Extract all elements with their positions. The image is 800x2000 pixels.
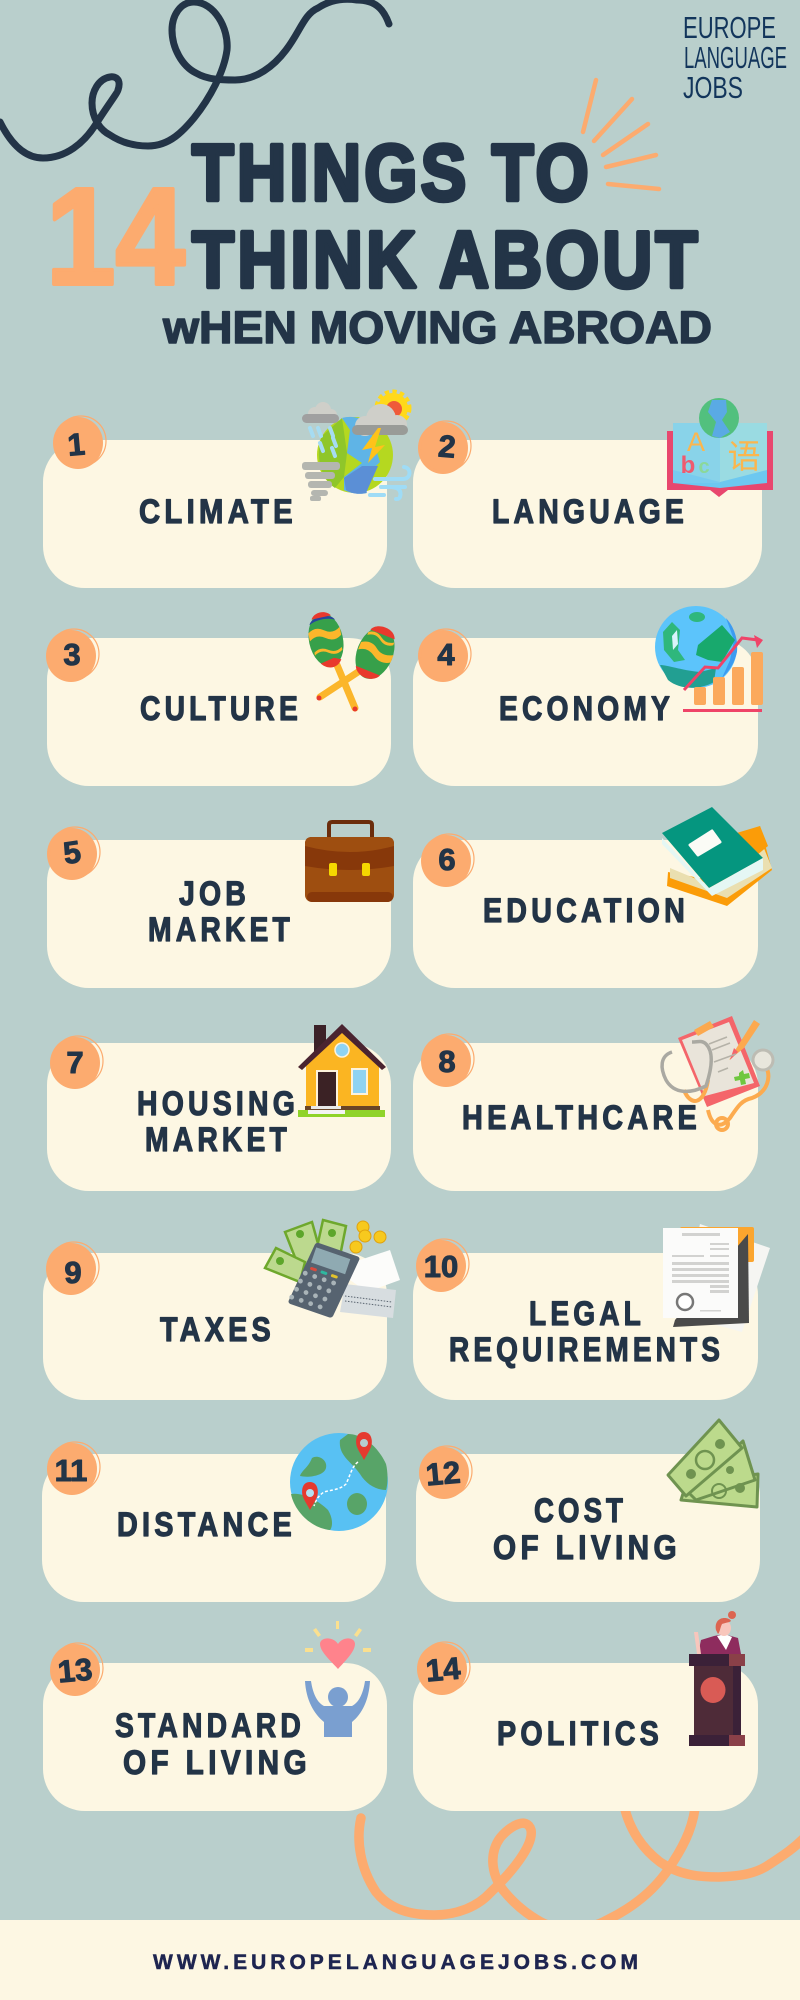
number badge 9 [46,1242,99,1295]
icon: person with heart [305,1621,371,1737]
number badge 10 [416,1239,469,1292]
icon: briefcase [305,822,394,902]
card 9: taxes [43,1220,400,1400]
number badge 3: 3 [63,637,81,672]
number badge 2: 2 [437,428,457,465]
card 10: legal requirements [413,1224,770,1400]
icon: language book: c [698,456,710,478]
number badge 7 [50,1036,103,1089]
label: COST [534,1492,627,1530]
subtitle: wHEN MOVING ABROAD [162,302,712,353]
icon: language book: A [687,427,705,457]
title spark lines [583,80,659,189]
card 4: economy [413,606,763,786]
card background [43,440,387,588]
label: POLITICS [497,1715,663,1753]
number badge 13 [50,1643,103,1696]
label: STANDARD [115,1707,305,1745]
card 6: education [413,807,772,988]
label: MARKET [145,1121,291,1159]
icon: books [662,807,772,906]
label: EDUCATION [483,892,689,930]
number badge 9: 9 [64,1255,82,1290]
number badge 2 [418,421,471,474]
card background [47,1043,391,1191]
label [115,1707,311,1782]
card 5: job market [47,822,394,988]
icon: money, calculator and receipts [265,1220,400,1321]
card 1: climate [43,393,410,588]
card 7: housing market [47,1024,391,1191]
label: ECONOMY [499,690,674,728]
number badge 11 [47,1442,100,1495]
label [493,1492,681,1567]
label: OF LIVING [123,1744,311,1782]
label: LEGAL [529,1295,645,1333]
card background [47,638,391,786]
card background [413,1043,758,1191]
card 12: cost of living [416,1420,760,1602]
number badge 1: 1 [66,426,86,463]
label [148,875,294,949]
logo: Europe Language Jobs: JOBS [683,70,743,105]
card 3: culture [46,609,402,786]
card background [47,840,391,988]
card 14: politics [413,1611,758,1811]
icon: language book: 语 [728,430,760,478]
number badge 14: 14 [424,1650,462,1688]
number badge 12: 12 [424,1455,462,1492]
card 8: healthcare [413,1016,773,1191]
label: CLIMATE [139,493,297,531]
number badge 6: 6 [438,842,456,877]
number badge 1 [53,416,106,469]
number badge 8: 8 [438,1044,456,1079]
card background [416,1454,760,1602]
number badge 7: 7 [66,1045,84,1080]
icon: legal documents [663,1224,770,1332]
number badge 11: 11 [55,1453,87,1488]
card 11: distance [42,1432,388,1602]
icon: clipboard and stethoscope [662,1016,773,1130]
label: OF LIVING [493,1529,681,1567]
title [46,128,712,353]
card background [42,1454,386,1602]
icon: globe with map pins [290,1432,388,1531]
label [137,1085,299,1159]
label: REQUIREMENTS [449,1331,724,1369]
number badge 5: 5 [61,834,83,871]
label: LANGUAGE [492,493,688,531]
card background [413,1253,758,1400]
card 2: language [413,398,773,588]
label: JOB [179,875,250,913]
label: DISTANCE [117,1506,296,1544]
number badge 13: 13 [56,1652,94,1689]
icon: climate globe [302,393,410,501]
decorative swirl: top left [0,0,389,158]
footer URL: WWW.EUROPELANGUAGEJOBS.COM [153,1951,642,1974]
icon: speaker at podium [689,1611,745,1746]
number badge 3 [46,629,99,682]
icon: banknotes [668,1420,758,1507]
label [449,1295,724,1369]
label: HOUSING [137,1085,299,1123]
icon: language book: b [681,452,695,479]
card background [413,440,762,588]
card background [413,840,758,988]
card background [413,638,758,786]
title number 14: 14 [46,160,185,314]
card background [413,1663,758,1811]
number badge 14 [417,1642,470,1695]
number badge 8 [421,1034,474,1087]
label: CULTURE [140,690,302,728]
label: MARKET [148,911,294,949]
icon: globe with growth chart [655,606,763,712]
label: TAXES [160,1311,275,1349]
number badge 10: 10 [424,1249,458,1284]
footer band [0,1920,800,2000]
label: HEALTHCARE [462,1099,701,1137]
number badge 4 [418,629,471,682]
icon: house [298,1024,386,1117]
number badge 6 [421,834,474,887]
title line 2: THINK ABOUT [192,215,701,304]
icon: language book [667,398,773,497]
icon: maracas [303,609,402,712]
card 13: standard of living [43,1621,387,1811]
card background [43,1253,387,1400]
number badge 4: 4 [437,637,455,672]
card background [43,1663,387,1811]
number badge 12 [419,1446,472,1499]
title line 1: THINGS TO [192,128,592,217]
logo: Europe Language Jobs [683,10,787,105]
number badge 5 [47,827,100,880]
decorative swirl: bottom right [359,1800,800,1929]
